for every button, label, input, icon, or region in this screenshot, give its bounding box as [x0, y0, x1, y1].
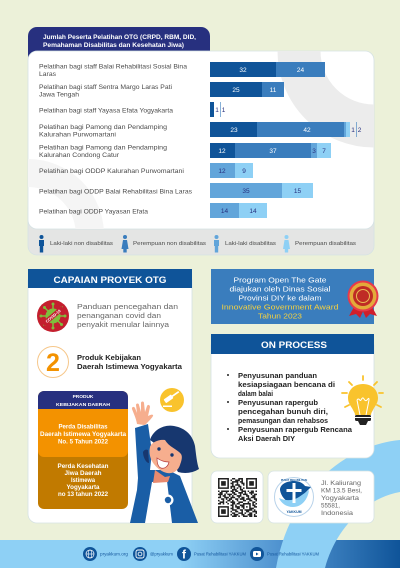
chart heading: Jumlah Peserta Pelatihan OTG (CRPD, RBM, DID, [43, 34, 196, 41]
bar: row 4: 2 [358, 127, 362, 134]
bar: row 8: 14 [249, 208, 257, 215]
address text: Indonesia [321, 510, 353, 517]
bar: row 5: 37 [269, 148, 277, 155]
logo: Yakkum [274, 478, 314, 516]
address text: Yogyakarta [321, 495, 359, 502]
bar: row 5: 12 [218, 148, 226, 155]
badge: number 2: 2 [46, 349, 60, 377]
process list: Penyusunan panduan [238, 373, 317, 380]
bar: row 8: 14 [221, 208, 228, 215]
panel heading: ON PROCESS [261, 340, 327, 350]
bar: row 2: 25 [232, 87, 240, 94]
address text: KM 13.5 Besi, [321, 488, 362, 494]
address text: 55581, [321, 502, 340, 510]
policy card heading: PRODUK [73, 394, 94, 400]
row labels: Pelatihan bagi ODDP Balai Rehabilitasi Bina Laras [39, 190, 192, 196]
row labels: Pelatihan bagi ODDP Kalurahan Purwomartani [39, 169, 184, 175]
row labels: Pelatihan bagi ODDP Yayasan Efata [39, 210, 149, 216]
panel: capaian proyek OTG [28, 269, 199, 523]
address text: Jl. Kaliurang [321, 480, 361, 487]
award text: Program Open The Gate [234, 276, 326, 284]
chart heading [28, 27, 210, 60]
award text [222, 276, 338, 320]
icon: instagram [133, 547, 147, 561]
bar: row 7: 15 [294, 188, 301, 195]
icon: covid virus [37, 300, 69, 332]
regional policy text: Produk Kebijakan [77, 355, 141, 362]
logo: Yakkum: PUSAT REHABILITASI [281, 479, 307, 482]
bar: row 5 [210, 143, 331, 158]
icon: covid virus: COVID-19 [44, 308, 62, 324]
website label: pryakkum.org [100, 552, 129, 556]
panel: on process [211, 334, 383, 458]
badge: number 2 [38, 346, 68, 378]
panel heading [28, 269, 192, 288]
award text: diajukan oleh Dinas Sosial [230, 284, 331, 294]
covid guidance text [77, 304, 178, 329]
perda disabilitas [40, 424, 127, 446]
award text: Provinsi DIY ke dalam [238, 294, 322, 302]
bar: row 3 [210, 102, 226, 117]
row labels [39, 64, 192, 216]
legend: perempuan non disabilitas: Perempuan non disabilitas [133, 241, 206, 247]
legend: laki-laki disabilitas: Laki-laki disabilitas [225, 241, 276, 247]
icon: facebook [177, 547, 191, 562]
QR code [218, 479, 257, 516]
policy card [38, 391, 128, 509]
bar: row 4: 1 [351, 127, 355, 134]
row labels: Pelatihan bagi staff Balai Rehabilitasi Sosial Bina [39, 64, 188, 70]
bar: row 1 [210, 62, 325, 77]
legend: perempuan non disabilitas [121, 235, 206, 252]
legend strip [28, 200, 374, 255]
bar: row 5: 7 [322, 148, 326, 155]
perda disabilitas: Perda Disabilitas [58, 424, 108, 430]
process list: Penyusunan rapergub [238, 400, 318, 407]
social links [83, 547, 320, 562]
process list: Aksi Daerah DIY [238, 436, 295, 443]
legend: perempuan disabilitas [283, 235, 356, 252]
logo: Yakkum: YAKKUM [286, 510, 302, 514]
panel: award banner [211, 269, 378, 324]
icon: website [83, 547, 97, 561]
address text [321, 480, 362, 517]
chart card [28, 50, 374, 230]
footer band [0, 440, 400, 568]
icon: youtube [250, 547, 264, 561]
row labels: Kalurahan Purwomartani [39, 132, 116, 138]
panel heading [211, 334, 374, 354]
legend: laki-laki non disabilitas: Laki-laki non disabilitas [50, 241, 113, 247]
covid guidance text: penanganan covid dan [77, 313, 161, 320]
legend: laki-laki disabilitas [214, 235, 276, 252]
icon: gavel [160, 388, 184, 412]
row labels: Pelatihan bagi Pamong dan Pendamping [39, 146, 167, 152]
perda kesehatan jiwa: Yogyakarta [66, 485, 100, 491]
perda kesehatan jiwa: Istimewa [71, 478, 96, 484]
bar: row 8 [210, 203, 267, 218]
bar: row 3: 1 [222, 107, 226, 114]
bar: row 1: 32 [239, 67, 247, 74]
perda kesehatan jiwa: Perda Kesehatan [58, 464, 109, 470]
bar: row 3: 1 [215, 107, 219, 114]
panel heading: CAPAIAN PROYEK OTG [54, 275, 167, 285]
row labels: Laras [39, 72, 56, 78]
row labels: Kalurahan Condong Catur [39, 153, 119, 159]
bar: row 7: 35 [242, 188, 250, 195]
stacked bar chart [210, 62, 362, 218]
panel body [28, 280, 192, 523]
row labels: Jawa Tengah [39, 92, 79, 98]
panel body [211, 345, 374, 458]
youtube label: Pusat Rehabilitasi YAKKUM [267, 552, 320, 556]
panel: QR code [211, 471, 263, 523]
legend: laki-laki non disabilitas [39, 235, 113, 252]
bar: row 2: 11 [270, 87, 277, 94]
regional policy text: Daerah Istimewa Yogyakarta [77, 364, 182, 371]
icon: facebook: f [182, 548, 187, 562]
policy card heading [56, 394, 111, 408]
bar: row 6 [210, 163, 253, 178]
icon: award medal [348, 280, 378, 318]
legend: perempuan disabilitas: Perempuan disabilitas [295, 241, 356, 247]
perda disabilitas: Daerah Istimewa Yogyakarta [40, 432, 127, 438]
policy card heading: KEBIJAKAN DAERAH [56, 402, 111, 408]
bar: row 6: 9 [242, 168, 246, 175]
bar: row 4: 42 [303, 127, 311, 134]
row labels: Pelatihan bagi staff Yayasa Efata Yogyakarta [39, 108, 174, 114]
facebook label: Pusat Rehabilitasi YAKKUM [194, 552, 247, 556]
legend [39, 235, 356, 252]
process list: dalam balai [238, 391, 273, 398]
bar: row 4: 23 [230, 127, 238, 134]
covid guidance text: penyakit menular lainnya [77, 322, 169, 329]
bar: row 4 [210, 122, 362, 137]
bar: row 5: 3 [312, 148, 316, 155]
process list: pencegahan bunuh diri, [238, 409, 328, 416]
process list: pemasungan dan rehabsos [238, 418, 328, 425]
row labels: Pelatihan bagi Pamong dan Pendamping [39, 125, 167, 131]
icon: light bulb [342, 376, 383, 425]
bar: row 2 [210, 82, 284, 97]
award text: Innovative Government Award [222, 302, 338, 312]
perda kesehatan jiwa: Jiwa Daerah [64, 471, 102, 477]
panel: training participants chart [28, 27, 374, 256]
illustration: waving person [130, 402, 199, 523]
instagram label: @pryakkum [150, 552, 174, 556]
perda kesehatan jiwa: no 13 tahun 2022 [58, 492, 109, 498]
perda disabilitas: No. 5 Tahun 2022 [58, 440, 109, 446]
award text: Tahun 2023 [258, 312, 302, 320]
covid guidance text: Panduan pencegahan dan [77, 304, 178, 311]
bar: row 7 [210, 183, 313, 198]
bar: row 1: 24 [297, 67, 304, 74]
row labels: Pelatihan bagi staff Sentra Margo Laras Pati [39, 85, 172, 91]
bar: row 6: 12 [218, 168, 226, 175]
process list: kesiapsiagaan bencana di [238, 382, 335, 389]
panel: address card [268, 471, 374, 523]
perda kesehatan jiwa [58, 464, 109, 498]
process list: Penyusunan rapergub Rencana [238, 427, 352, 434]
process list [227, 373, 352, 443]
regional policy text [77, 355, 182, 371]
chart heading: Pemahaman Disabilitas dan Kesehatan Jiwa) [43, 42, 184, 49]
